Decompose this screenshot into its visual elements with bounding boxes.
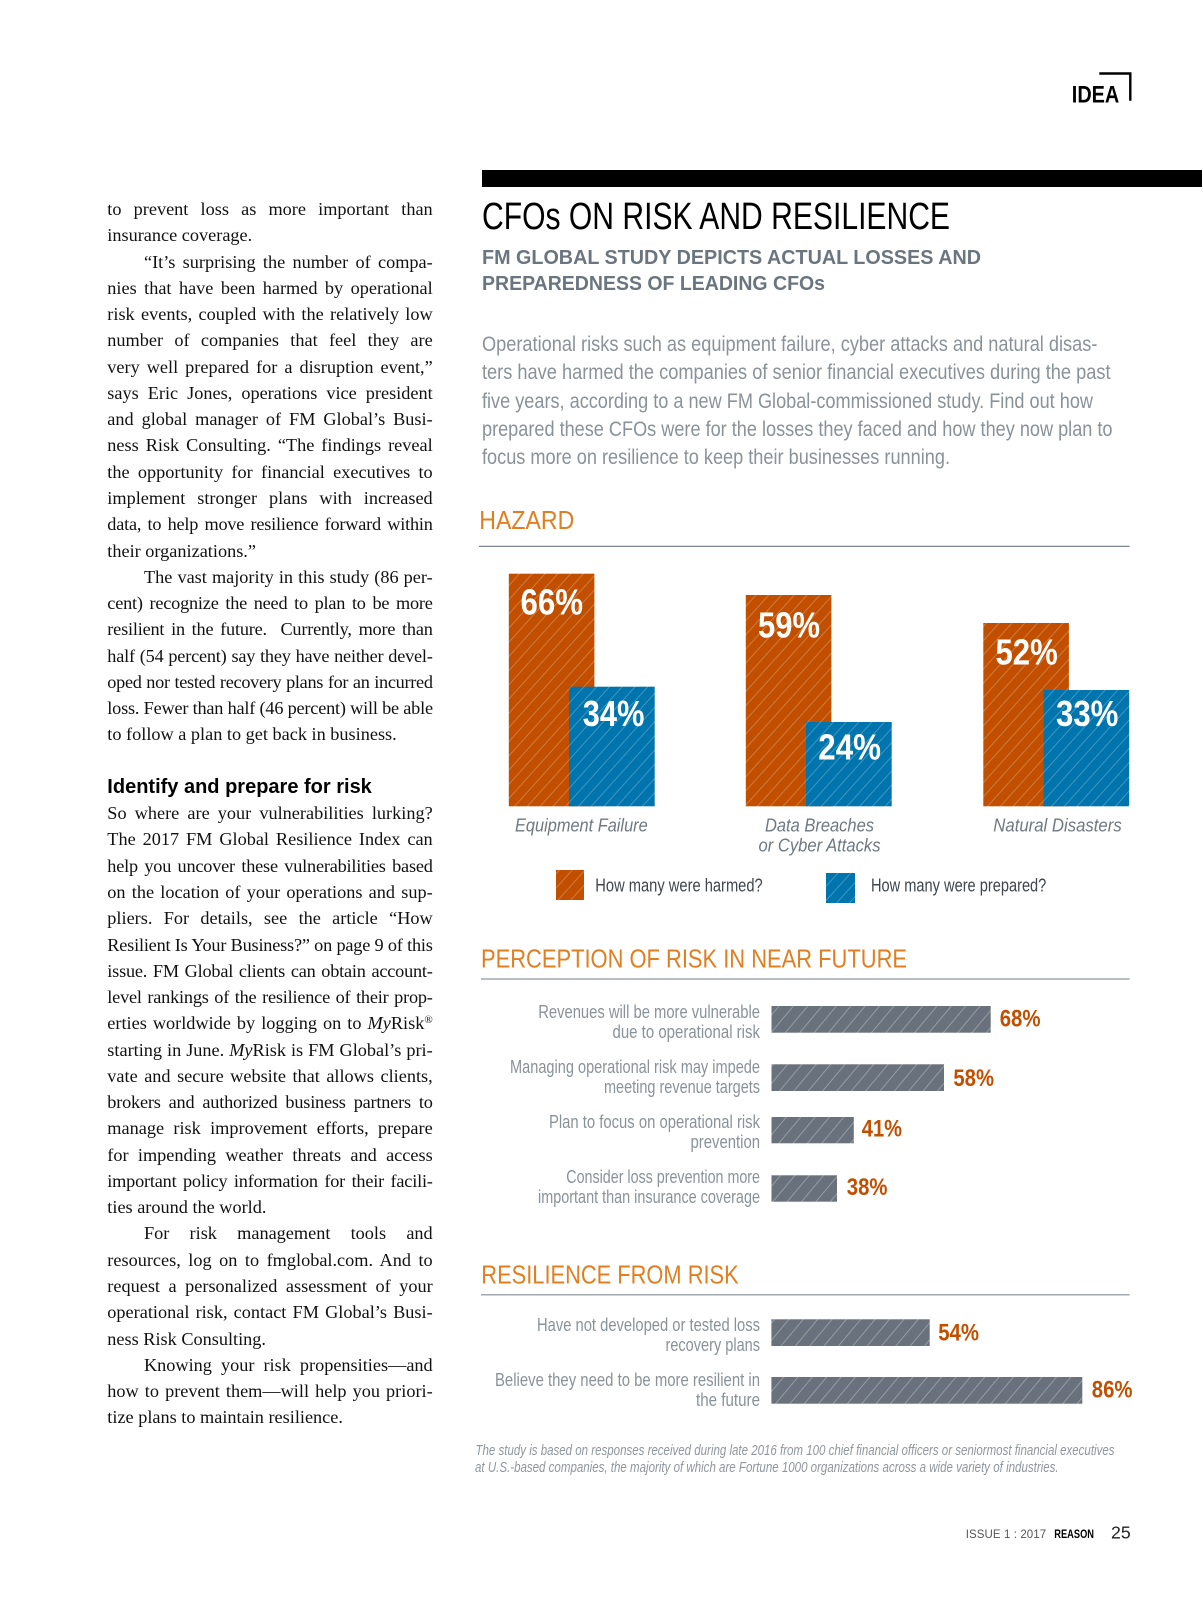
article text column: The 2017 FM Global Resilience Index can [107,829,433,849]
article text column: data, to help move resilience forward within [107,514,433,534]
bar group: data breaches: 24% [818,726,881,767]
article text column: tize plans to maintain resilience. [107,1407,343,1427]
bar group: equipment failure: Equipment Failure [515,816,648,836]
subtitle: FM GLOBAL STUDY DEPICTS ACTUAL LOSSES AND [482,246,981,269]
article text column: erties worldwide by logging on to MyRisk® [107,1013,433,1033]
bar row: 41%: Plan to focus on operational risk [549,1111,761,1132]
intro paragraph: five years, according to a new FM Global-commissioned study. Find out how [482,389,1093,413]
article text column: For risk management tools and [144,1223,433,1243]
title: CFOs ON RISK AND RESILIENCE [482,196,950,238]
article text column: nies that have been harmed by operational [107,278,433,298]
article text column: starting in June. MyRisk is FM Global’s pri- [107,1040,433,1060]
legend: How many were harmed? [595,874,763,896]
article text column: very well prepared for a disruption event,” [107,357,433,377]
panel: resilience from risk [481,1259,1132,1410]
heading: resilience from risk: RESILIENCE FROM RISK [481,1259,739,1289]
subtitle [482,246,981,295]
page footer: ISSUE 1 : 2017 [966,1529,1046,1541]
bar group: data breaches: 59% [758,605,820,646]
bar row: 86%: the future [696,1389,760,1410]
bar row: 54%: recovery plans [666,1334,760,1355]
article text column: vate and secure website that allows clients, [107,1066,433,1086]
bar row: 58%: 58% [953,1065,994,1092]
bar row: 86% [495,1369,1132,1410]
article text column: their organizations.” [107,541,256,561]
article text column: ness Risk Consulting. [107,1329,266,1349]
bar group: equipment failure [509,574,655,836]
panel: hazard [479,505,1130,903]
intro paragraph: ters have harmed the companies of senior financial executives during the past [482,360,1111,384]
article text column: the opportunity for financial executives to [107,462,433,482]
bar group: natural disasters: 33% [1056,693,1118,734]
intro paragraph [482,332,1113,469]
bar row: 41%: prevention [690,1131,760,1152]
bar row: 38%: 38% [847,1174,888,1201]
bar group: natural disasters: 52% [996,631,1058,672]
article text column: brokers and authorized business partners to [107,1092,433,1112]
article text column: level rankings of the resilience of their prop- [107,987,433,1007]
footnote: at U.S.-based companies, the majority of which are Fortune 1000 organizations across a wide variety of industries. [475,1460,1059,1476]
article text column: and global manager of FM Global’s Busi- [107,409,433,429]
article text column: says Eric Jones, operations vice president [107,383,433,403]
article text column: half (54 percent) say they have neither devel- [107,646,433,666]
bar row: 68%: 68% [1000,1006,1041,1033]
bar row: 54% [537,1314,979,1355]
legend: How many were prepared? [871,874,1046,896]
article text column: how to prevent them—will help you priori- [107,1381,433,1401]
panel: perception of risk [481,944,1130,1207]
article text column: on the location of your operations and sup- [107,882,433,902]
bar row: 86%: Believe they need to be more resilient in [495,1369,760,1390]
article text column: “It’s surprising the number of compa- [144,252,433,272]
article text column: ness Risk Consulting. “The findings reveal [107,435,433,455]
bar group: equipment failure: 34% [583,693,644,734]
bar row: 38%: Consider loss prevention more [566,1166,760,1187]
bar row: 68%: Revenues will be more vulnerable [538,1001,760,1022]
bar group: data breaches: Data Breaches [765,816,874,836]
article text column: number of companies that feel they are [107,330,433,350]
bar group: natural disasters [983,623,1129,836]
article text column: insurance coverage. [107,225,252,245]
article text column: resilient in the future. Currently, more than [107,619,433,639]
article text column: to follow a plan to get back in business. [107,724,397,744]
article text column: for impending weather threats and access [107,1145,433,1165]
bar row: 38%: important than insurance coverage [538,1186,760,1207]
bar row: 58% [510,1056,994,1097]
article text column: pliers. For details, see the article “How [107,908,433,928]
article text column: loss. Fewer than half (46 percent) will be able [107,698,433,718]
article text column: cent) recognize the need to plan to be more [107,593,433,613]
heading: hazard: HAZARD [479,505,574,535]
bar row: 54%: Have not developed or tested loss [537,1314,760,1335]
article text column: help you uncover these vulnerabilities based [107,856,433,876]
article text column: risk events, coupled with the relatively low [107,304,433,324]
section tag: IDEA: IDEA [1072,81,1119,108]
article text column: Identify and prepare for risk [107,776,372,798]
bar row: 58%: Managing operational risk may impede [510,1056,760,1077]
bar row: 68% [538,1001,1041,1042]
footnote [475,1443,1114,1476]
bar group: data breaches: or Cyber Attacks [758,836,880,856]
article text column: operational risk, contact FM Global’s Busi- [107,1302,433,1322]
intro paragraph: Operational risks such as equipment failure, cyber attacks and natural disas- [482,332,1097,356]
article text column: So where are your vulnerabilities lurking? [107,803,433,823]
bar row: 54%: 54% [938,1320,979,1347]
article text column: issue. FM Global clients can obtain account- [107,961,433,981]
article text column: oped nor tested recovery plans for an incurred [107,672,433,692]
article text column: Knowing your risk propensities—and [144,1355,433,1375]
bar row: 58%: meeting revenue targets [604,1076,760,1097]
article text column: to prevent loss as more important than [107,199,433,219]
legend [556,870,1046,903]
bar group: natural disasters: Natural Disasters [993,816,1122,836]
bar row: 38% [538,1166,888,1207]
bar group: data breaches [746,595,892,856]
subtitle: PREPAREDNESS OF LEADING CFOs [482,272,825,295]
article text column: The vast majority in this study (86 per- [144,567,433,587]
bar row: 41% [549,1111,902,1152]
article text column: manage risk improvement efforts, prepare [107,1118,433,1138]
article text column: request a personalized assessment of your [107,1276,433,1296]
article text column: resources, log on to fmglobal.com. And to [107,1250,433,1270]
article text column [107,199,433,1427]
article text column: implement stronger plans with increased [107,488,433,508]
page footer [966,1522,1131,1542]
intro paragraph: focus more on resilience to keep their businesses running. [482,445,950,469]
bar group: equipment failure: 66% [520,581,583,622]
bar row: 68%: due to operational risk [612,1021,761,1042]
article text column: important policy information for their facili- [107,1171,433,1191]
article text column: ties around the world. [107,1197,266,1217]
article text column: Resilient Is Your Business?” on page 9 of this [107,935,433,955]
page footer: REASON [1054,1529,1094,1541]
page footer: 25 [1111,1522,1131,1542]
heading: perception of risk: PERCEPTION OF RISK IN NEAR FUTURE [481,944,907,974]
bar row: 86%: 86% [1092,1376,1132,1403]
bar row: 41%: 41% [862,1116,902,1143]
black header bar [482,170,1202,187]
